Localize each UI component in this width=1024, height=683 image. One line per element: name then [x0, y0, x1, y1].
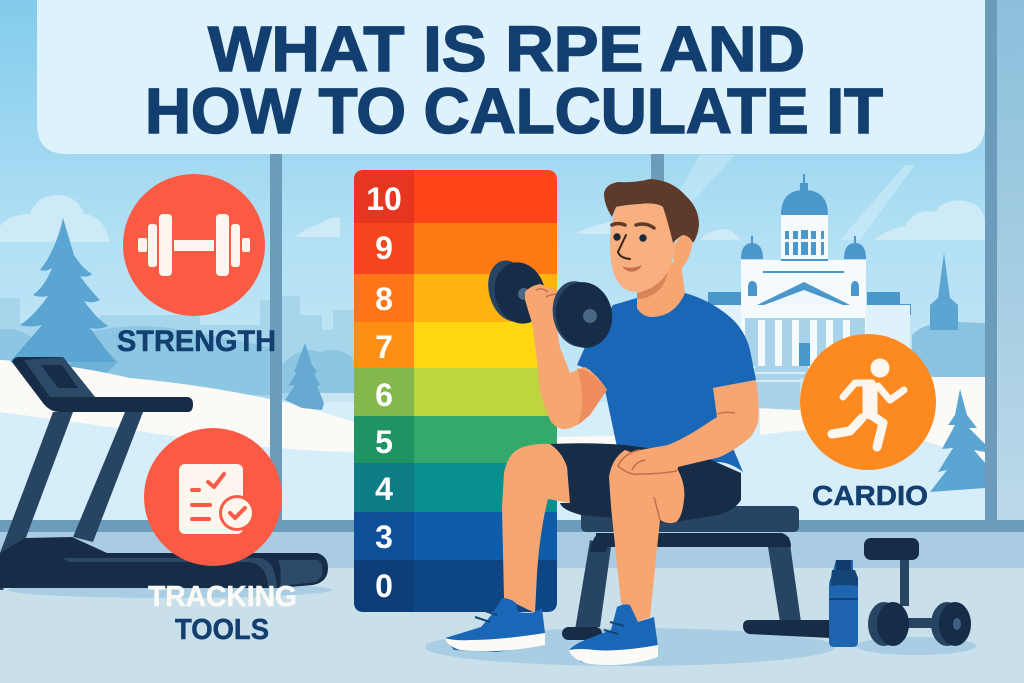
second plate: [548, 277, 617, 352]
facial features: [612, 224, 654, 271]
cathedral building: [708, 174, 985, 410]
resting arm: [617, 380, 759, 475]
scale numbers: 8: [375, 281, 393, 317]
tracking tools icon: [144, 428, 282, 566]
right shoe: [569, 604, 658, 665]
scale numbers: 5: [375, 424, 393, 460]
title heading: HOW TO CALCULATE IT: [145, 75, 883, 147]
window frame: [0, 0, 1024, 532]
scale numbers: 4: [375, 471, 393, 507]
scale numbers: 9: [375, 230, 393, 266]
cardio label: CARDIO: [812, 480, 928, 511]
athlete figure: [445, 179, 759, 665]
shorts: [550, 443, 741, 523]
strength label: STRENGTH: [117, 325, 276, 358]
ear: [672, 235, 692, 270]
scale numbers: 10: [366, 181, 402, 217]
title heading: WHAT IS RPE AND: [208, 13, 805, 85]
hair: [604, 179, 699, 243]
treadmill: [0, 357, 328, 590]
dumbbell on stand: [864, 538, 971, 646]
scale numbers: 3: [375, 519, 393, 555]
dumbbell held: [482, 256, 577, 329]
clouds: [0, 195, 985, 242]
RPE scale: [354, 170, 557, 612]
finger lines: [536, 289, 560, 297]
head: [610, 200, 676, 292]
trees: [10, 218, 985, 492]
tracking tools label: [148, 581, 297, 646]
neck: [637, 255, 685, 317]
strength icon: [123, 174, 265, 316]
scale numbers: 7: [375, 329, 393, 365]
scale numbers: 0: [375, 568, 393, 604]
hand detail: [618, 412, 735, 474]
water bottle: [829, 560, 858, 647]
scale numbers: 6: [375, 377, 393, 413]
window background: sky: [0, 0, 1024, 530]
scale numbers: [366, 181, 402, 604]
neck shadow: [637, 272, 668, 299]
bench: [562, 506, 830, 640]
title panel: [37, 0, 985, 154]
shirt: [577, 293, 756, 472]
tracking tools label: TRACKING: [148, 581, 297, 613]
title heading: [145, 13, 883, 147]
left shoe: [445, 598, 545, 652]
snow hills and pale ground: [0, 360, 997, 525]
distant city skyline and hills: [0, 296, 354, 425]
cardio icon: [800, 334, 936, 470]
floor: [0, 532, 1024, 683]
viewer left leg: [502, 444, 570, 613]
raised arm: [525, 284, 607, 429]
viewer right leg: [609, 450, 684, 622]
tracking tools label: TOOLS: [175, 614, 269, 646]
